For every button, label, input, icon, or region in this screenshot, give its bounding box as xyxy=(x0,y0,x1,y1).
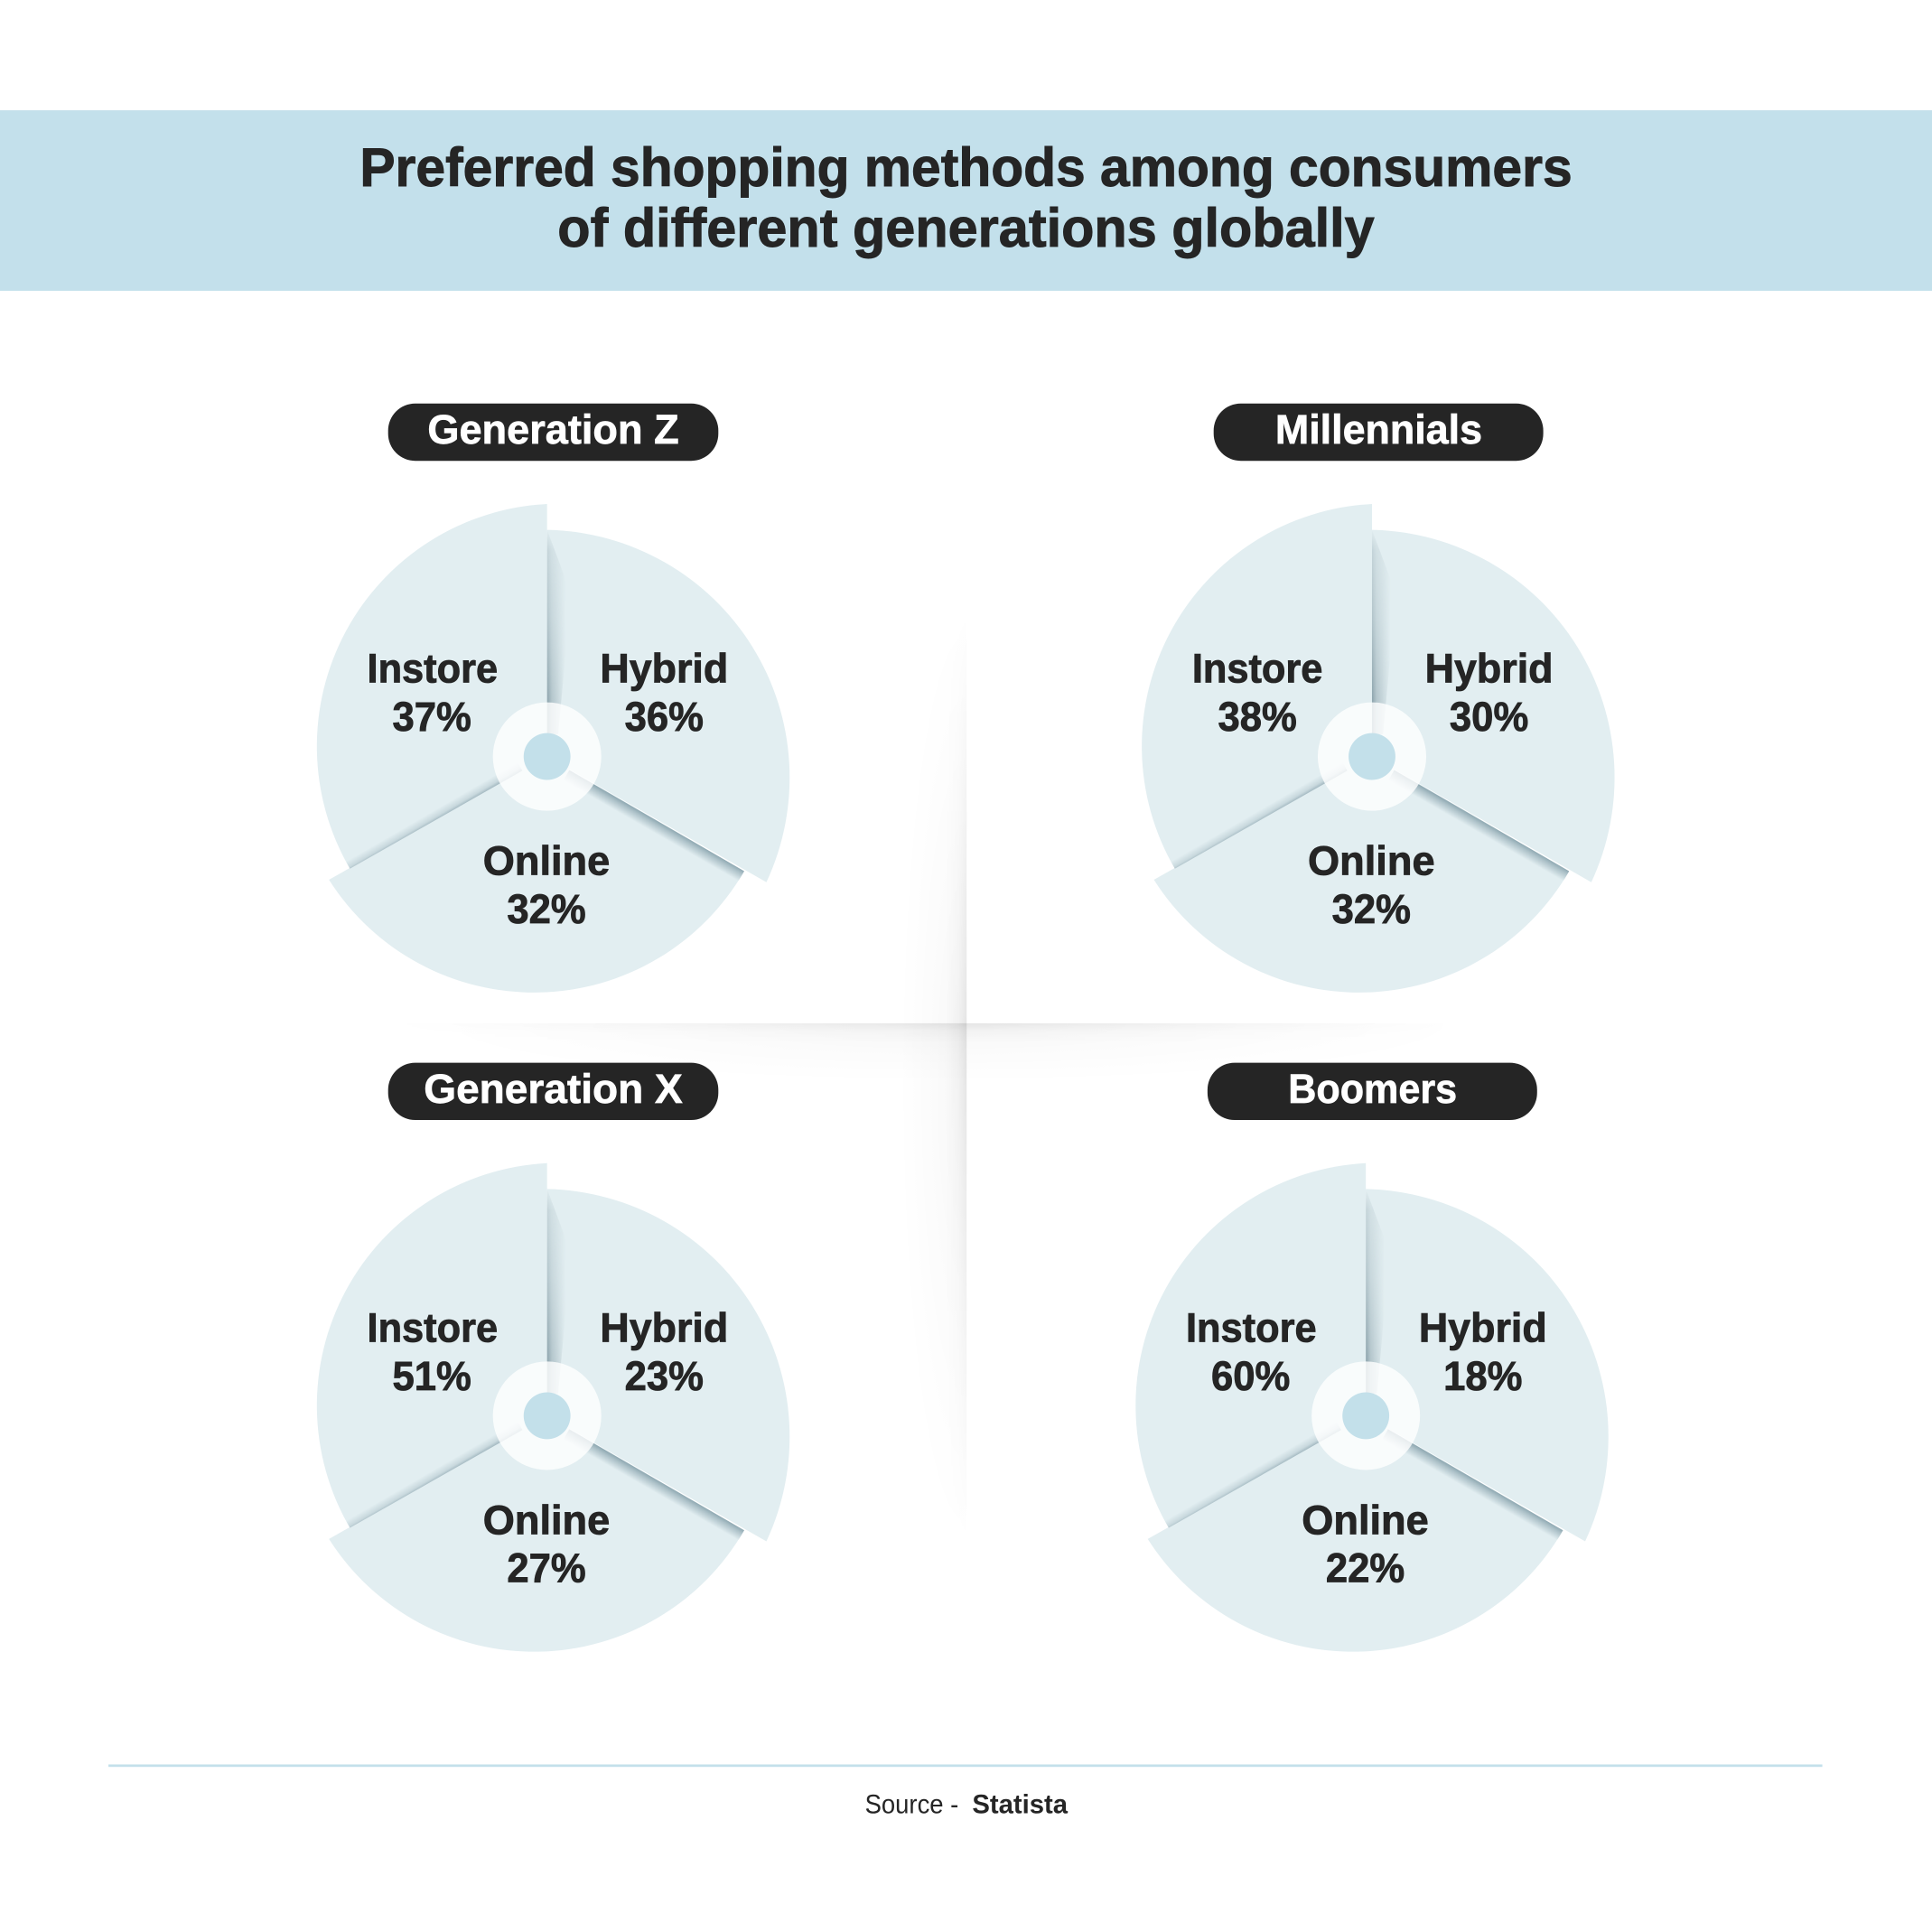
label pill: Boomers xyxy=(1208,1063,1537,1120)
slice: Hybrid xyxy=(547,530,789,882)
label pill: Generation X xyxy=(388,1063,718,1120)
label: Instore 38% xyxy=(1192,646,1322,740)
slice: Instore xyxy=(317,504,547,869)
slice: Instore xyxy=(317,1163,547,1528)
label: Instore 60%: Instore xyxy=(1186,1305,1317,1351)
label: Online 32% xyxy=(1308,838,1435,932)
label pill: Generation Z xyxy=(388,404,718,461)
label: Online 22% xyxy=(1302,1497,1429,1591)
label: Hybrid 36%: Hybrid xyxy=(600,646,728,692)
label: Instore 37% xyxy=(368,646,498,740)
title banner xyxy=(0,110,1932,291)
title: Preferred shopping methods among consumers xyxy=(359,137,1573,198)
slice: Instore xyxy=(1135,1163,1366,1528)
label: Instore 51% xyxy=(368,1305,498,1399)
label: Hybrid 36%: 36% xyxy=(625,694,704,740)
label: Online 32%: Online xyxy=(1308,838,1435,884)
label: Online 32%: Online xyxy=(483,838,610,884)
slice: Online xyxy=(329,1415,744,1652)
label: Hybrid 30% xyxy=(1425,646,1554,740)
horizontal divider shadow xyxy=(595,1023,1282,1037)
label: Instore 60% xyxy=(1186,1305,1317,1399)
pie chart: Generation Z xyxy=(317,504,789,993)
slice: Hybrid xyxy=(547,1189,789,1542)
pie chart: Generation X xyxy=(317,1163,789,1652)
slice: Hybrid xyxy=(1366,1189,1609,1542)
slice: Instore xyxy=(1142,504,1372,869)
pie chart: Millennials xyxy=(1142,504,1615,993)
label: Online 32% xyxy=(483,838,610,932)
label: Hybrid 23% xyxy=(600,1305,728,1399)
label pill: Generation X: Generation X xyxy=(424,1066,683,1112)
label pill: Millennials: Millennials xyxy=(1275,406,1482,453)
label pill: Boomers: Boomers xyxy=(1288,1066,1457,1112)
label: Hybrid 18%: Hybrid xyxy=(1419,1305,1547,1351)
label: Instore 37%: 37% xyxy=(392,694,471,740)
hub xyxy=(1311,1361,1420,1470)
source note: Source - xyxy=(865,1789,958,1819)
title: of different generations globally xyxy=(557,198,1375,258)
label pill: Millennials xyxy=(1214,404,1544,461)
label pill: Generation Z: Generation Z xyxy=(427,406,679,453)
label: Instore 38%: Instore xyxy=(1192,646,1322,692)
label: Online 32%: 32% xyxy=(507,886,586,932)
label: Online 27%: 27% xyxy=(507,1545,586,1591)
label: Online 27% xyxy=(483,1497,610,1591)
vertical divider shadow xyxy=(950,749,966,1397)
label: Online 22%: Online xyxy=(1302,1497,1429,1543)
source note: Statista xyxy=(972,1789,1068,1819)
label: Instore 60%: 60% xyxy=(1211,1353,1290,1399)
title xyxy=(359,137,1573,258)
label: Hybrid 18% xyxy=(1419,1305,1547,1399)
footer rule xyxy=(108,1764,1823,1767)
label: Hybrid 23%: 23% xyxy=(625,1353,704,1399)
slice: Hybrid xyxy=(1372,530,1615,882)
slice: Online xyxy=(329,757,744,993)
slice: Online xyxy=(1148,1415,1563,1652)
label: Hybrid 30%: Hybrid xyxy=(1425,646,1554,692)
label: Instore 37%: Instore xyxy=(368,646,498,692)
label: Hybrid 18%: 18% xyxy=(1443,1353,1522,1399)
label: Instore 38%: 38% xyxy=(1218,694,1297,740)
source note xyxy=(865,1789,1068,1819)
label: Online 32%: 32% xyxy=(1332,886,1411,932)
hub xyxy=(1318,703,1426,811)
slice: Online xyxy=(1154,757,1569,993)
pie chart: Boomers xyxy=(1135,1163,1609,1652)
hub xyxy=(493,1361,602,1470)
hub xyxy=(493,703,602,811)
label: Hybrid 23%: Hybrid xyxy=(600,1305,728,1351)
label: Hybrid 30%: 30% xyxy=(1450,694,1528,740)
label: Online 22%: 22% xyxy=(1326,1545,1405,1591)
label: Instore 51%: 51% xyxy=(392,1353,471,1399)
label: Hybrid 36% xyxy=(600,646,728,740)
label: Online 27%: Online xyxy=(483,1497,610,1543)
label: Instore 51%: Instore xyxy=(368,1305,498,1351)
